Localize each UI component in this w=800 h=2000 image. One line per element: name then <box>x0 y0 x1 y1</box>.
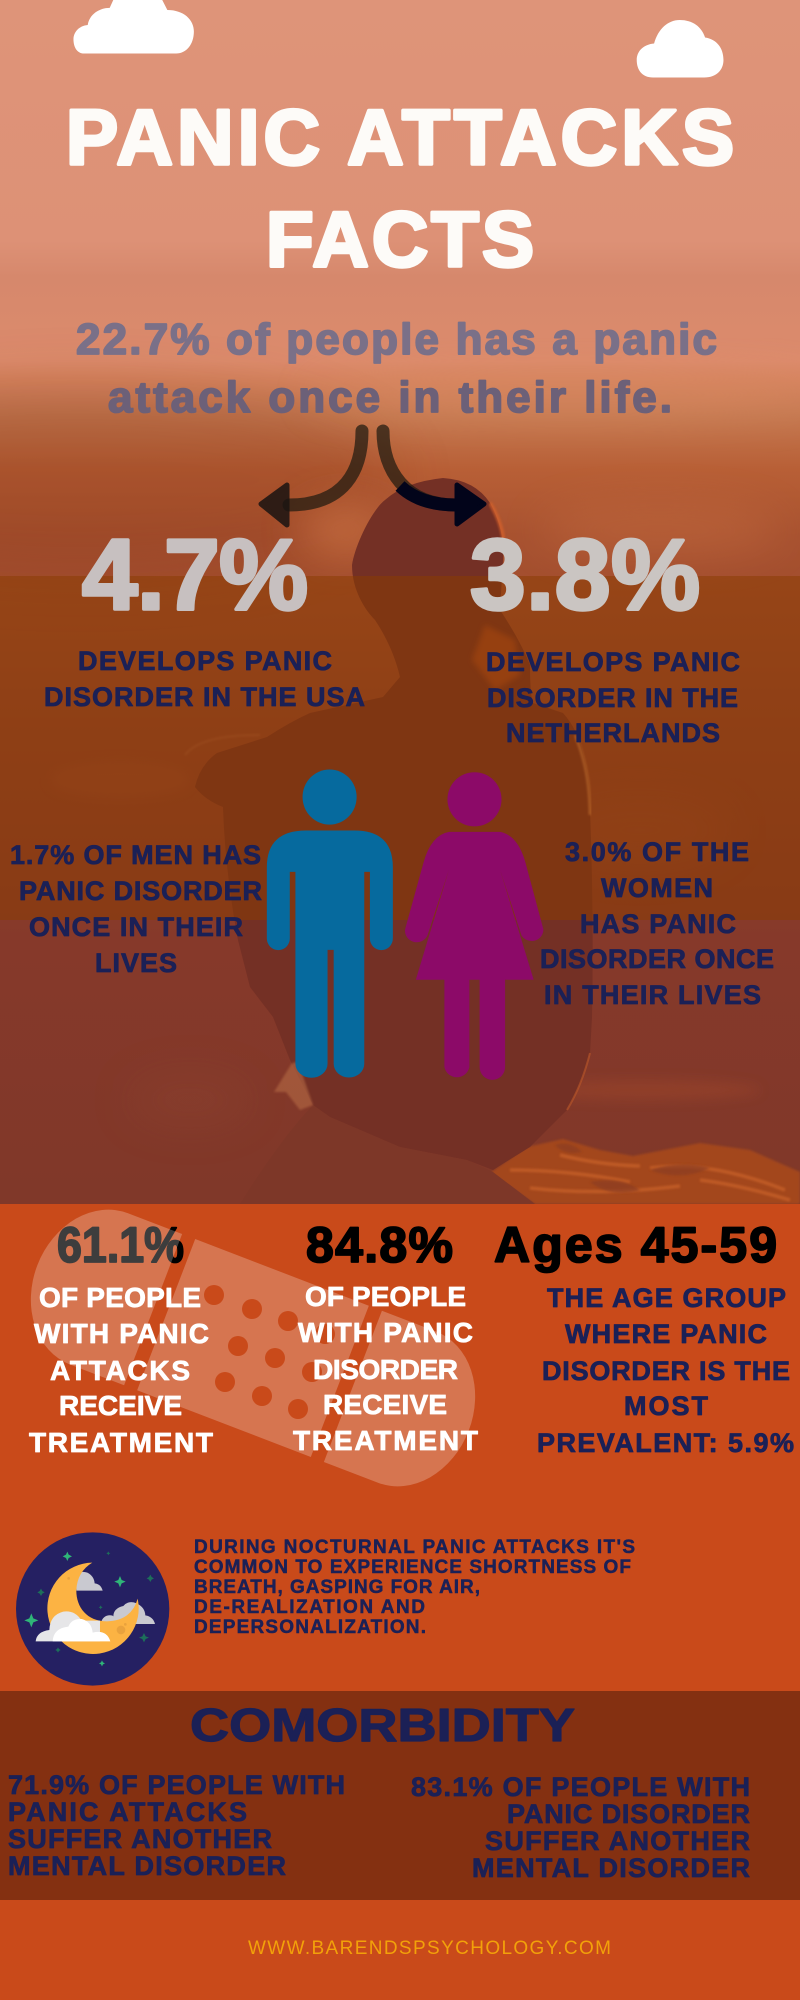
subtitle <box>76 315 717 422</box>
stat: 71.9%: 71.9% OF PEOPLE WITH <box>8 1770 345 1800</box>
panel: treatment section background <box>0 1204 800 2000</box>
stat: 83.1%: MENTAL DISORDER <box>472 1853 750 1883</box>
cloud right <box>637 20 723 77</box>
stat: Netherlands: 3.8% <box>470 519 700 631</box>
icon: man <box>267 769 393 1078</box>
stat: age group description <box>537 1283 794 1458</box>
seated lower body <box>240 1105 535 1204</box>
title: FACTS <box>266 195 534 283</box>
text: nocturnal panic attacks: BREATH, GASPING FOR AIR, <box>194 1577 480 1598</box>
darker band overlay <box>0 576 800 920</box>
heading: comorbidity: COMORBIDITY <box>190 1699 575 1751</box>
panel: comorbidity <box>0 1691 800 1900</box>
stat: men: LIVES <box>95 948 177 978</box>
icon: moon and clouds <box>16 1532 169 1686</box>
stat: USA: DEVELOPS PANIC <box>78 646 332 676</box>
stat: women: 3.0% OF THE <box>565 837 749 867</box>
stat: age group description: PREVALENT: 5.9% <box>537 1428 794 1458</box>
stat: 83.1% <box>411 1772 750 1883</box>
stat: 83.1%: 83.1% OF PEOPLE WITH <box>411 1772 750 1802</box>
cloud left <box>73 0 194 54</box>
stat: 83.1%: SUFFER ANOTHER <box>485 1826 750 1856</box>
rock <box>490 1139 800 1204</box>
stat: USA <box>44 519 365 712</box>
stat: 84.8% and ages headline: 61.1% <box>57 1217 184 1273</box>
stat: age group description: WHERE PANIC <box>565 1319 767 1349</box>
stat: men <box>10 840 262 978</box>
stat: 61.1% description: RECEIVE <box>59 1390 182 1421</box>
text: nocturnal panic attacks: DURING NOCTURNAL PANIC ATTACKS IT'S <box>194 1537 635 1558</box>
stat: Netherlands <box>470 519 740 748</box>
stat: women: DISORDER ONCE <box>540 944 774 974</box>
stat: men: PANIC DISORDER <box>19 876 262 906</box>
stat: 84.8% description: RECEIVE <box>323 1389 447 1420</box>
footer url: WWW.BARENDSPSYCHOLOGY.COM <box>248 1938 611 1959</box>
stat: 84.8% and ages headline: 84.8% <box>306 1217 453 1273</box>
stat: Netherlands: DEVELOPS PANIC <box>486 647 740 677</box>
stat: age group description: DISORDER IS THE <box>542 1356 790 1386</box>
bandage holes <box>204 1285 335 1419</box>
stat: 61.1% description: OF PEOPLE <box>39 1282 201 1313</box>
stat: age group description: THE AGE GROUP <box>547 1283 786 1313</box>
arrow right <box>383 431 484 524</box>
stat: 84.8% description: WITH PANIC <box>298 1317 473 1348</box>
stat: Netherlands: NETHERLANDS <box>506 718 720 748</box>
stat: 84.8% description: OF PEOPLE <box>305 1281 466 1312</box>
arrow left <box>261 431 362 525</box>
icon: woman <box>405 772 543 1080</box>
stat: men: ONCE IN THEIR <box>29 912 243 942</box>
text: nocturnal panic attacks: COMMON TO EXPERIENCE SHORTNESS OF <box>194 1557 631 1578</box>
stat: 71.9%: SUFFER ANOTHER <box>8 1824 272 1854</box>
text: nocturnal panic attacks: DE-REALIZATION AND <box>194 1597 425 1618</box>
subtitle: 22.7% of people has a panic <box>76 315 717 364</box>
stat: Netherlands: DISORDER IN THE <box>487 683 738 713</box>
stat: 71.9% <box>8 1770 345 1881</box>
stat: USA: DISORDER IN THE USA <box>44 682 365 712</box>
subtitle: attack once in their life. <box>108 373 672 422</box>
stat: 84.8% and ages headline: Ages 45-59 <box>494 1217 777 1273</box>
stat: 61.1% description: TREATMENT <box>29 1427 213 1458</box>
stat: USA: 4.7% <box>82 519 308 631</box>
stat: women: WOMEN <box>601 873 713 903</box>
stat: 61.1% description <box>29 1282 213 1458</box>
stat: 71.9%: MENTAL DISORDER <box>8 1851 286 1881</box>
stat: women: HAS PANIC <box>580 909 736 939</box>
stat: women <box>540 837 774 1010</box>
stat: 61.1% description: WITH PANIC <box>34 1318 209 1349</box>
stat: 84.8% description <box>293 1281 478 1456</box>
title: PANIC ATTACKS <box>66 93 734 181</box>
person silhouette <box>195 478 593 1170</box>
stat: women: IN THEIR LIVES <box>544 980 761 1010</box>
title <box>66 93 734 283</box>
text: nocturnal panic attacks: DEPERSONALIZATION. <box>194 1617 426 1638</box>
stat: 84.8% description: TREATMENT <box>293 1425 478 1456</box>
icon: bandage <box>8 1190 498 1506</box>
stat: age group description: MOST <box>624 1391 708 1421</box>
rim lights <box>490 503 504 545</box>
stat: men: 1.7% OF MEN HAS <box>10 840 261 870</box>
background photo: sunset sky and seated person <box>0 0 800 1204</box>
stat: 83.1%: PANIC DISORDER <box>507 1799 750 1829</box>
arrows <box>261 431 484 525</box>
stat: 61.1% description: ATTACKS <box>50 1355 190 1386</box>
text: nocturnal panic attacks <box>194 1537 635 1638</box>
stat: 84.8% and ages headline <box>57 1217 777 1273</box>
stat: 71.9%: PANIC ATTACKS <box>8 1797 247 1827</box>
stat: 84.8% description: DISORDER <box>313 1354 458 1385</box>
